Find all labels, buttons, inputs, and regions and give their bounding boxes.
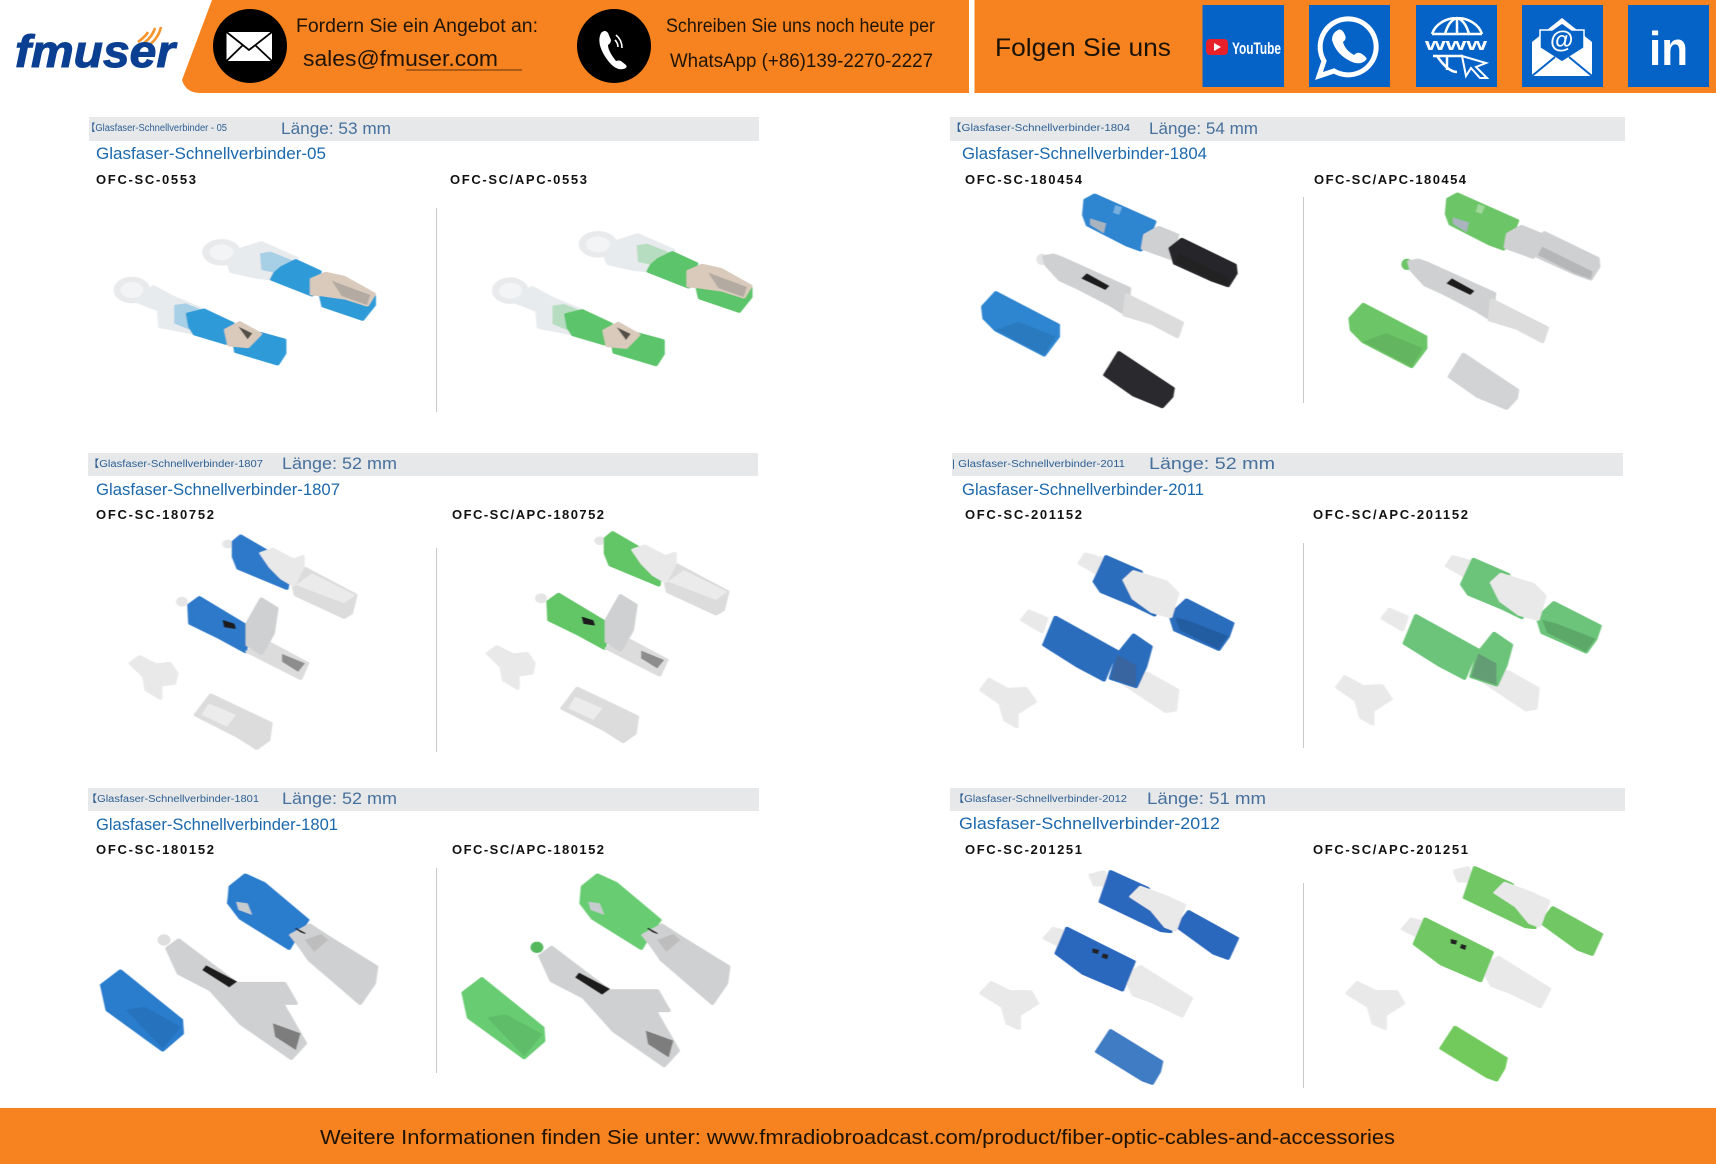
model SC: OFC-SC-180752	[96, 507, 214, 522]
length: Länge: 52 mm	[282, 789, 397, 808]
icon: linkedin	[1628, 5, 1709, 87]
length: Länge: 52 mm	[282, 454, 397, 473]
contact: whatsapp	[577, 9, 936, 83]
small label: 【Glasfaser-Schnellverbinder-1801	[86, 793, 259, 805]
panel: Glasfaser-Schnellverbinder-1804	[950, 117, 1625, 408]
length: Länge: 51 mm	[1147, 789, 1266, 808]
small label: 【Glasfaser-Schnellverbinder-1807	[88, 458, 263, 470]
logo signal waves	[138, 27, 161, 47]
divider	[436, 868, 437, 1073]
model APC: OFC-SC/APC-180752	[452, 507, 604, 522]
icon: www globe	[1416, 5, 1497, 87]
model APC: OFC-SC/APC-180454	[1314, 172, 1467, 187]
logo wordmark: fmuser	[15, 26, 178, 77]
icon: youtube: YouTube	[1232, 39, 1281, 58]
length: Länge: 54 mm	[1149, 119, 1258, 138]
panel: Glasfaser-Schnellverbinder-05	[86, 117, 759, 412]
model SC: OFC-SC-201251	[965, 842, 1082, 857]
connector photos	[981, 868, 1601, 1083]
icon: envelope	[213, 9, 287, 83]
length bar	[950, 117, 1625, 141]
contact: email	[213, 9, 538, 83]
footer link text: Weitere Informationen finden Sie unter: www.fmradiobroadcast.com/product/fiber-optic-cables-and-accessories	[320, 1127, 1395, 1149]
connector photos	[131, 533, 727, 748]
logo: fmuser	[15, 26, 178, 77]
divider	[436, 208, 437, 412]
whatsapp line one: Schreiben Sie uns noch heute per	[666, 16, 936, 37]
model APC: OFC-SC/APC-0553	[450, 172, 587, 187]
title: Glasfaser-Schnellverbinder-2011	[962, 480, 1204, 499]
title: Glasfaser-Schnellverbinder-1801	[96, 815, 338, 834]
icon: linkedin: in	[1649, 22, 1688, 75]
header band: social	[974, 0, 1716, 93]
connector photos	[102, 875, 728, 1066]
footer band	[0, 1108, 1716, 1164]
divider	[1303, 883, 1304, 1088]
icon: phone	[577, 9, 651, 83]
length: Länge: 53 mm	[281, 119, 391, 138]
model SC: OFC-SC-201152	[965, 507, 1082, 522]
title: Glasfaser-Schnellverbinder-1807	[96, 480, 340, 499]
panel: Glasfaser-Schnellverbinder-2011	[952, 453, 1623, 748]
icon: youtube	[1202, 5, 1284, 87]
icon: www globe: www	[1423, 35, 1488, 54]
length: Länge: 52 mm	[1149, 454, 1275, 473]
title: Glasfaser-Schnellverbinder-2012	[959, 814, 1220, 833]
quote request text: Fordern Sie ein Angebot an:	[296, 16, 538, 37]
model SC: OFC-SC-180454	[965, 172, 1083, 187]
panel: Glasfaser-Schnellverbinder-1801	[86, 788, 759, 1073]
length bar	[952, 453, 1623, 476]
social heading: Folgen Sie uns	[995, 34, 1171, 62]
title: Glasfaser-Schnellverbinder-05	[96, 144, 326, 163]
model SC: OFC-SC-0553	[96, 172, 196, 187]
model APC: OFC-SC/APC-180152	[452, 842, 604, 857]
email address: sales@fmuser.com	[303, 46, 498, 71]
title: Glasfaser-Schnellverbinder-1804	[962, 144, 1207, 163]
length bar	[950, 788, 1625, 811]
icon: whatsapp	[1309, 5, 1390, 87]
length bar	[88, 788, 759, 811]
model APC: OFC-SC/APC-201152	[1313, 507, 1468, 522]
connector photos	[981, 554, 1600, 727]
model APC: OFC-SC/APC-201251	[1313, 842, 1468, 857]
icon: open mail	[1522, 5, 1603, 87]
model SC: OFC-SC-180152	[96, 842, 214, 857]
panel: Glasfaser-Schnellverbinder-2012	[950, 788, 1625, 1088]
whatsapp line two: WhatsApp (+86)139-2270-2227	[670, 51, 933, 72]
divider	[436, 548, 437, 752]
connector photos	[983, 194, 1598, 408]
length bar	[88, 453, 758, 476]
small label: 【Glasfaser-Schnellverbinder-1804	[950, 122, 1131, 134]
divider	[1303, 543, 1304, 748]
underline smudge	[406, 69, 522, 71]
small label: 【Glasfaser-Schnellverbinder - 05	[86, 122, 227, 134]
connector photos	[114, 231, 750, 365]
length bar	[89, 117, 759, 141]
small label: | Glasfaser-Schnellverbinder-2011	[952, 459, 1125, 470]
small label: 【Glasfaser-Schnellverbinder-2012	[953, 793, 1127, 805]
panel: Glasfaser-Schnellverbinder-1807	[88, 453, 758, 752]
divider	[1303, 197, 1304, 403]
header band: contact	[182, 0, 969, 93]
icon: open mail: @	[1550, 27, 1573, 54]
